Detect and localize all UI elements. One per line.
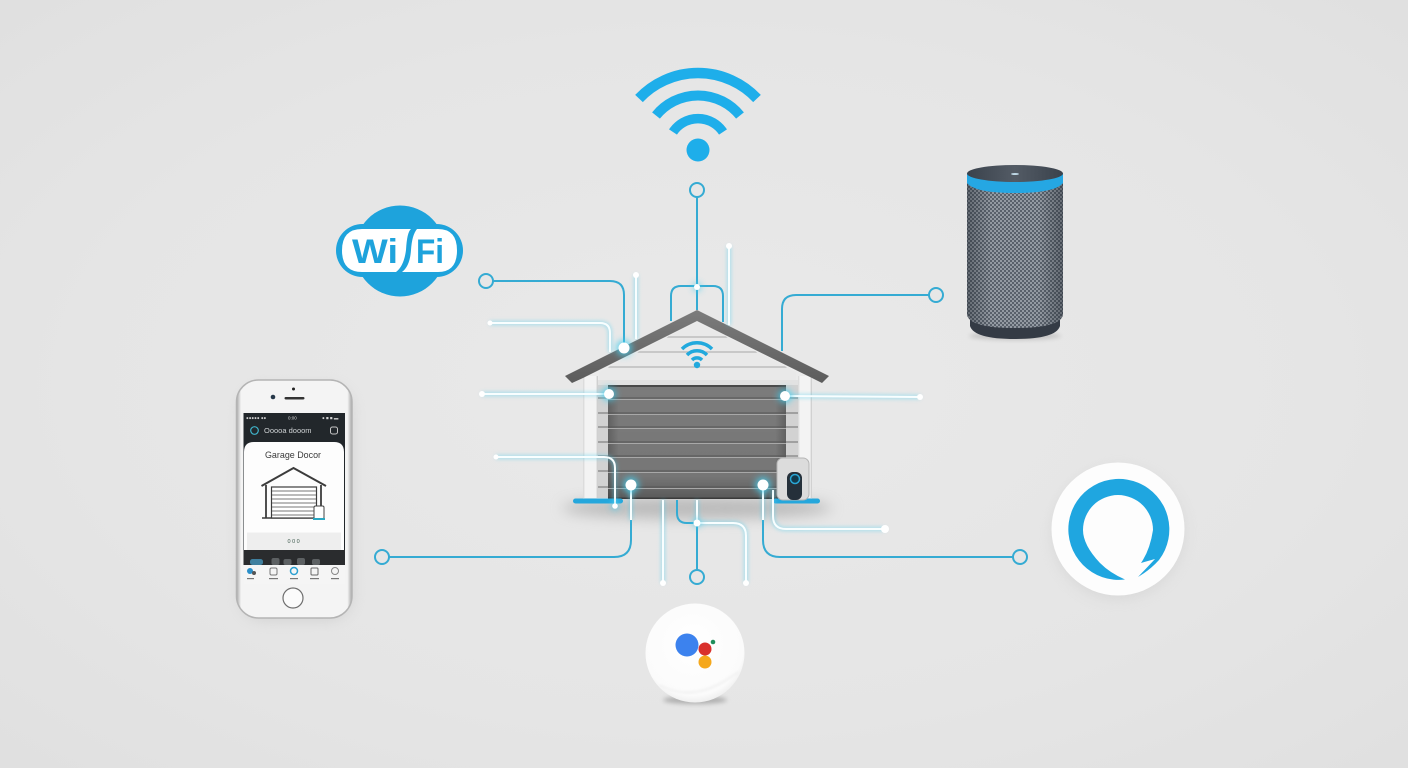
card title: Garage Docor [265,450,321,461]
roof [565,310,829,383]
tab bar [244,565,345,584]
smartphone [236,380,352,620]
left post [583,376,598,498]
glowing junction nodes [602,283,792,527]
garage door [608,385,786,499]
side siding [598,385,798,498]
cyan base strips [573,498,820,504]
right post [798,376,812,498]
garage house [562,310,832,519]
icon: wifi on gable [682,343,712,368]
connector lines: cyan circuit traces [389,197,1013,570]
icon: smart speaker [967,165,1063,340]
icon: assistant ring badge [1052,462,1184,599]
icon: large wifi signal [639,73,757,162]
icon: Wi-Fi logo badge: Wi [352,233,398,271]
status bar: ●●●●● ●● [246,416,267,420]
wall fill [583,318,812,499]
status bar [246,416,339,420]
status bar: 0:00 [288,416,297,420]
wall keypad [777,458,809,500]
phone speaker and camera [271,388,304,400]
card action button: 0 0 0 [288,539,300,545]
connector lines: glowing white traces [479,243,923,586]
app thumbnail strip [244,550,345,565]
status bar: ● ■ ■ ▬ [322,416,339,420]
app header: Ooooa dooom [264,426,312,435]
gable siding [598,336,798,385]
ground shadow [562,497,832,519]
home button [283,588,303,608]
mini garage illustration [262,468,326,520]
phone screen [244,413,345,584]
icon: Wi-Fi logo badge [336,206,463,296]
app header [251,426,338,435]
connector end rings [375,183,1027,584]
app card [244,442,344,550]
icon: Wi-Fi logo badge: Fi [416,233,444,271]
icon: assistant puck [646,604,744,704]
